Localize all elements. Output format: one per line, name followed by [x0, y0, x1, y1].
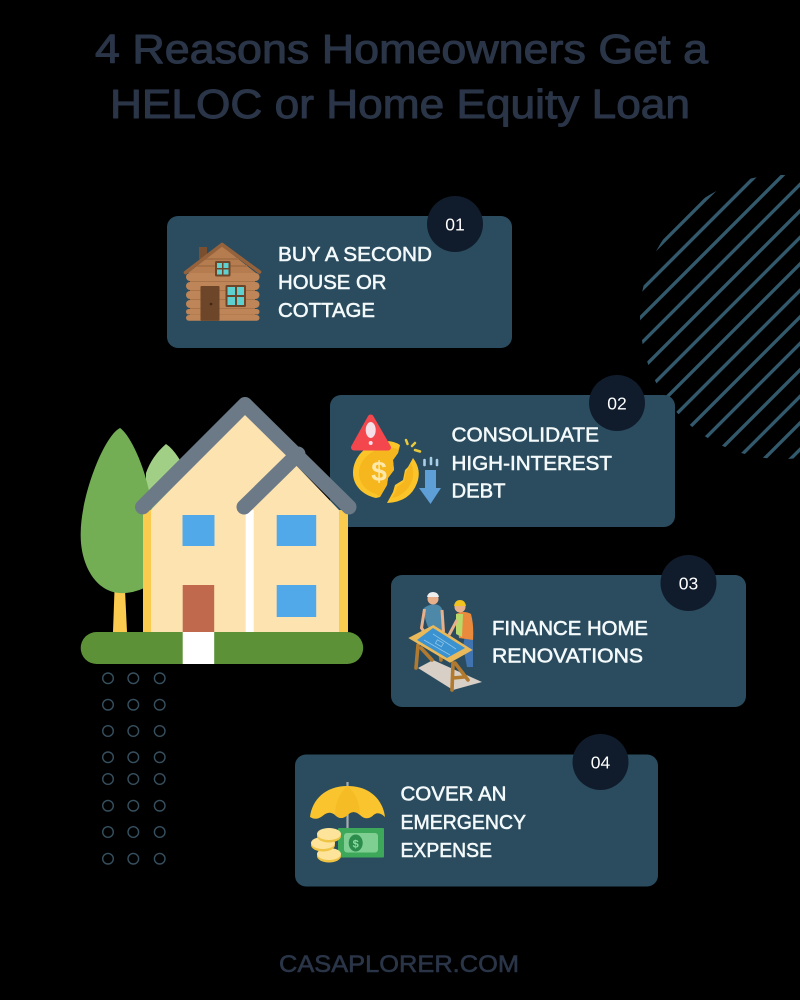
text: card 02 label: HIGH-INTEREST	[452, 452, 612, 475]
footer: source website: CASAPLORER.COM	[279, 951, 519, 978]
text: card 03 label: RENOVATIONS	[492, 644, 643, 668]
badge: 04	[572, 734, 628, 790]
panel: card 04 emergency expense	[295, 734, 658, 886]
text: card 03 label: FINANCE HOME	[492, 617, 648, 640]
icon: broken coin with alert	[353, 418, 441, 504]
icon: umbrella over money and coins: $	[353, 838, 359, 850]
badge: 02: 02	[607, 394, 627, 414]
text: card 04 label: EXPENSE	[400, 839, 492, 862]
panel: card 01 buy a second house	[167, 196, 512, 348]
badge: 03: 03	[679, 574, 698, 594]
text: card 02 label	[452, 424, 612, 502]
title: 4 Reasons Homeowners Get a	[95, 26, 708, 72]
badge: 02	[589, 375, 645, 431]
icon: broken coin with alert: $	[371, 456, 387, 487]
badge: 03	[660, 555, 716, 611]
text: card 02 label: CONSOLIDATE	[452, 424, 599, 446]
panel: card 02 consolidate debt	[330, 375, 675, 527]
icon: workers at a blueprint table	[408, 592, 482, 690]
text: card 01 label: BUY A SECOND	[278, 243, 432, 266]
text: card 01 label: HOUSE OR	[278, 271, 386, 294]
text: card 01 label: COTTAGE	[278, 299, 375, 322]
badge: 01: 01	[445, 214, 465, 234]
badge: 01	[427, 196, 483, 252]
illustration: house with trees	[81, 404, 363, 664]
icon: log cabin	[186, 244, 260, 321]
text: card 02 label: DEBT	[452, 480, 506, 502]
text: card 04 label	[400, 782, 526, 862]
badge: 04: 04	[591, 752, 610, 772]
text: card 01 label	[278, 243, 432, 322]
text: card 04 label: COVER AN	[400, 782, 506, 806]
decorative striped circle	[640, 175, 800, 459]
icon: umbrella over money and coins	[310, 782, 385, 862]
title: HELOC or Home Equity Loan	[110, 81, 690, 127]
title	[95, 26, 708, 127]
panel: card 03 finance renovations	[391, 555, 746, 707]
text: card 04 label: EMERGENCY	[400, 811, 526, 834]
text: card 03 label	[492, 617, 648, 668]
decorative dot grid	[103, 673, 165, 864]
